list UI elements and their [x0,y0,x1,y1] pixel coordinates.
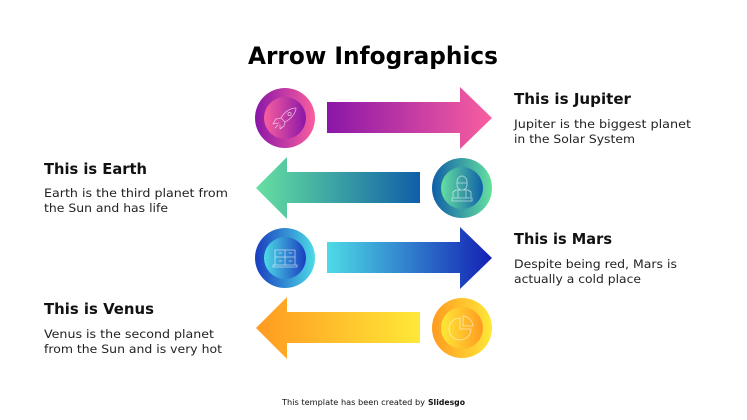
icon: rocket [255,88,315,148]
text: Earth description: Earth is the third planet from [44,186,228,200]
heading: Venus: This is Venus [44,300,154,318]
text: Jupiter description: Jupiter is the biggest planet [513,117,692,131]
icon: pie chart [432,298,492,358]
text: Jupiter description: in the Solar System [514,132,635,146]
text: Venus description: from the Sun and is very hot [44,342,223,356]
title: Arrow Infographics [248,42,498,70]
text: Venus description [44,327,223,356]
text: Earth description [44,186,228,215]
arrow: green to blue [256,157,420,219]
icon: laptop [255,228,315,288]
text: Earth description: the Sun and has life [44,201,168,215]
text: Mars description: Despite being red, Mars is [514,257,677,271]
icon: astronaut [432,158,492,218]
text: Mars description: actually a cold place [514,272,641,286]
footer credit: This template has been created by [281,398,425,407]
text: Venus description: Venus is the second planet [44,327,215,341]
heading: Mars: This is Mars [514,230,612,248]
heading: Earth: This is Earth [44,160,147,178]
footer credit: Slidesgo [428,398,465,407]
text: Jupiter description [513,117,692,146]
text: Mars description [514,257,677,286]
heading: Jupiter: This is Jupiter [514,90,632,108]
arrow: cyan to blue [327,227,492,289]
arrow: purple to pink [327,87,492,149]
arrow: orange to yellow [256,297,420,359]
